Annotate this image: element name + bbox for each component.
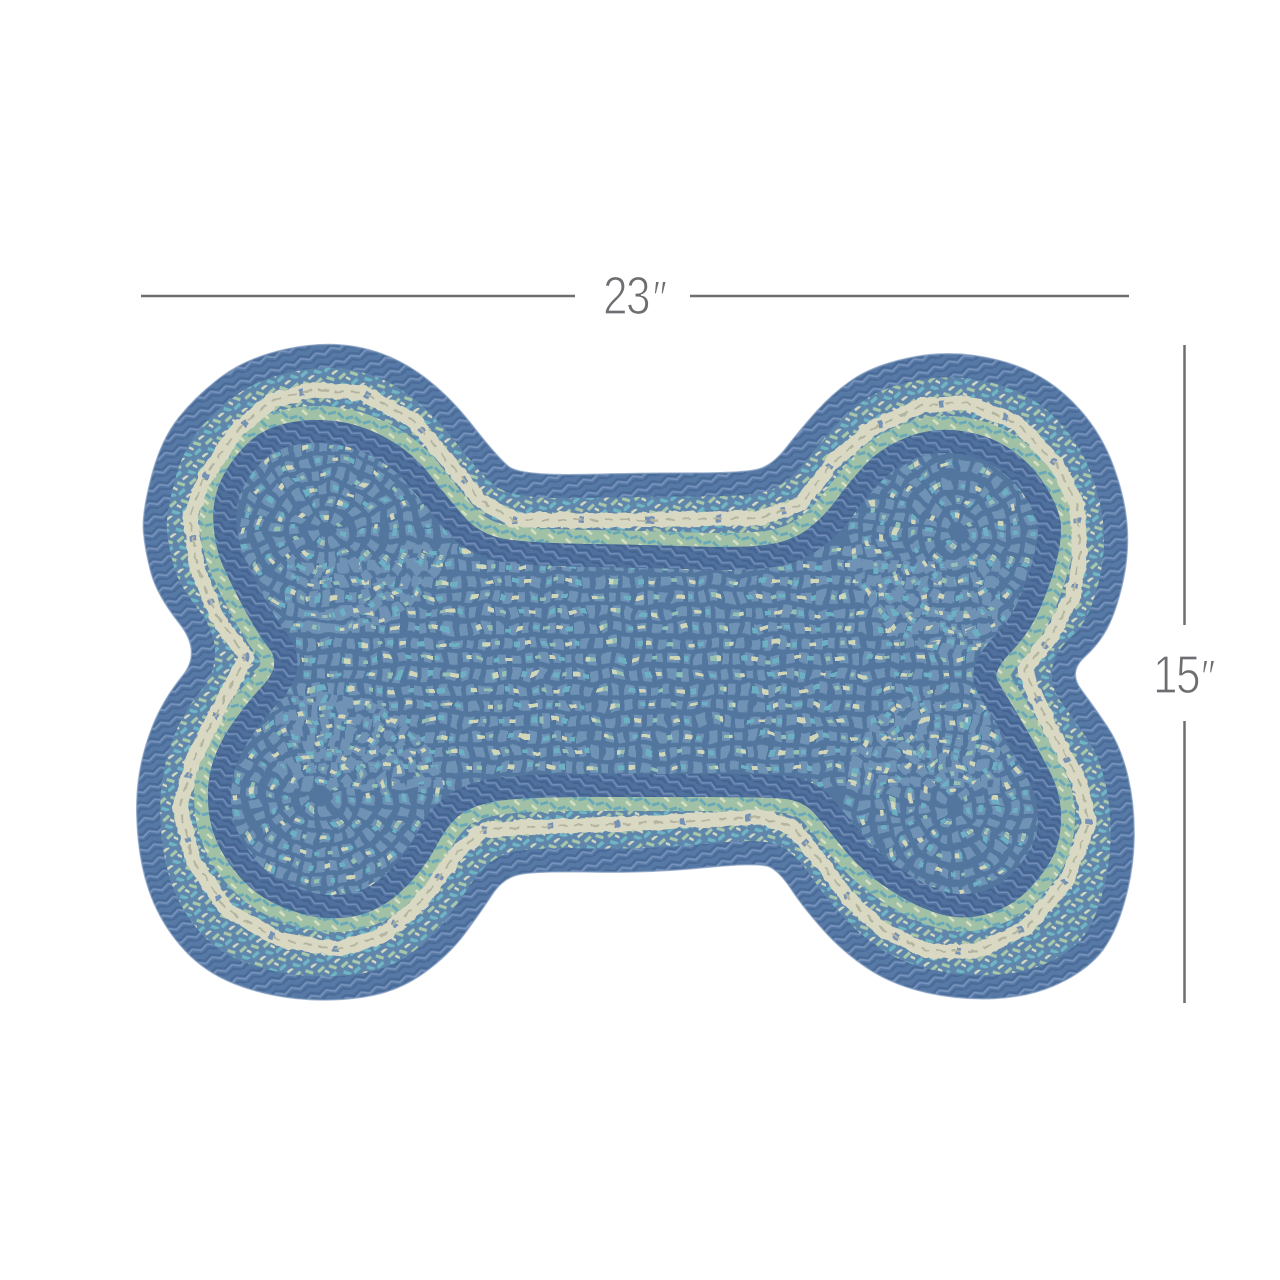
width dimension: 23 inches: ″ <box>651 271 667 327</box>
outer blue rim <box>137 345 1134 1000</box>
darker blue inner ring <box>208 420 1061 918</box>
soft light rug edge <box>137 345 1134 1000</box>
inner textured field <box>208 420 1061 918</box>
braided bone-shaped rug <box>137 345 1134 1000</box>
height dimension: 15 inches: 15 <box>1153 645 1199 705</box>
horizontal braid rows in bar <box>278 551 1000 783</box>
concentric braid rows in lobes <box>202 414 1061 925</box>
height dimension: 15 inches: ″ <box>1199 650 1215 706</box>
rug body: mixed teal, green and cream band <box>137 345 1134 1000</box>
cream braid stripe <box>180 390 1089 951</box>
width dimension: 23 inches: 23 <box>603 266 649 326</box>
height dimension: 15 inches <box>1153 345 1215 1003</box>
green braid row beside inner ring <box>208 420 1061 918</box>
width dimension: 23 inches <box>141 266 1129 327</box>
